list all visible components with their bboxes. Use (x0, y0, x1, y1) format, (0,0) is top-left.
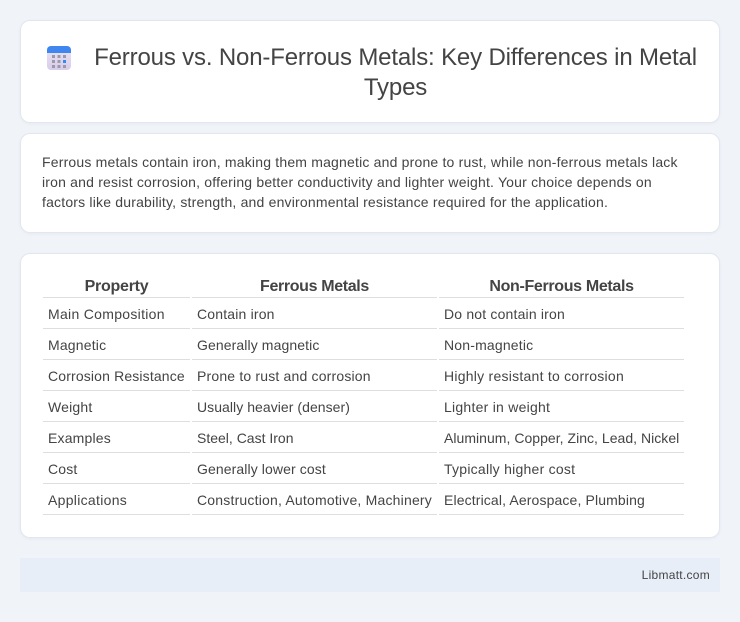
row: Magnetic (48, 337, 533, 353)
row: Cost: Cost (48, 461, 78, 477)
row: Examples: Steel, Cast Iron (197, 430, 294, 446)
row: Examples (48, 430, 679, 446)
text block: intro (42, 154, 678, 210)
panel: comparison table (20, 253, 720, 538)
title: Ferrous vs. Non-Ferrous Metals: Key Differences in Metal (94, 44, 697, 71)
row: Magnetic: Non-magnetic (444, 337, 533, 353)
icon: calendar (47, 46, 71, 70)
row: Corrosion Resistance: Corrosion Resistance (48, 368, 185, 384)
row: Corrosion Resistance: Prone to rust and corrosion (197, 368, 371, 384)
row: Corrosion Resistance: Highly resistant to corrosion (444, 368, 624, 384)
row: Applications: Applications (48, 492, 127, 508)
footer text: Libmatt.com (642, 568, 710, 582)
row: Examples: Examples (48, 430, 111, 446)
table header: Property: Property (85, 278, 148, 295)
row: Cost: Generally lower cost (197, 461, 326, 477)
table header: Ferrous Metals: Ferrous Metals (260, 278, 369, 295)
text block: intro: iron and resist corrosion, offering better conductivity and lighter weight. Your choice depends on (42, 174, 652, 190)
row: Weight: Usually heavier (denser) (197, 399, 350, 415)
row: Main Composition: Do not contain iron (444, 306, 565, 322)
row: Magnetic: Magnetic (48, 337, 106, 353)
row: Weight: Lighter in weight (444, 399, 550, 415)
row: Cost (48, 461, 575, 477)
row: Weight: Weight (48, 399, 92, 415)
footer bar (20, 558, 720, 592)
row: Weight (48, 399, 550, 415)
row: Magnetic: Generally magnetic (197, 337, 319, 353)
row: Corrosion Resistance (48, 368, 624, 384)
row: Main Composition: Contain iron (197, 306, 275, 322)
panel: title card (20, 20, 720, 123)
row: Cost: Typically higher cost (444, 461, 575, 477)
row: Applications (48, 492, 645, 508)
title second line: Types (364, 74, 427, 101)
row: Applications: Construction, Automotive, Machinery (197, 492, 432, 508)
row: Applications: Electrical, Aerospace, Plumbing (444, 492, 645, 508)
row: Main Composition: Main Composition (48, 306, 165, 322)
panel: intro card (20, 133, 720, 233)
text block: intro: Ferrous metals contain iron, making them magnetic and prone to rust, while non-ferrous metals lack (42, 154, 678, 170)
row: Main Composition (48, 306, 565, 322)
text block: intro: factors like durability, strength, and environmental resistance required for the application. (42, 194, 608, 210)
table header: Non-Ferrous Metals: Non-Ferrous Metals (489, 278, 634, 295)
row: Examples: Aluminum, Copper, Zinc, Lead, Nickel (444, 430, 679, 446)
